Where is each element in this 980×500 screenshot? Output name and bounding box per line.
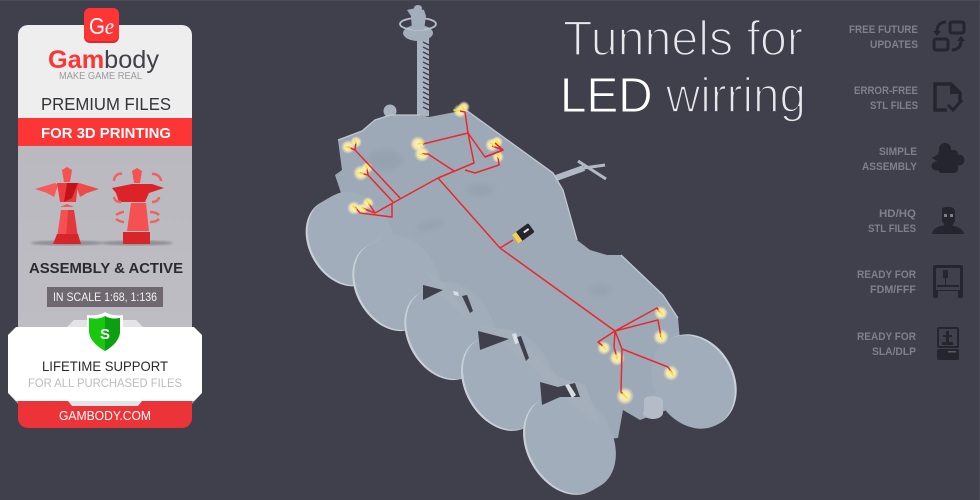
feature: free future updates bbox=[849, 22, 965, 51]
panel: premium files card bbox=[8, 8, 202, 428]
wheel 4 bbox=[445, 315, 571, 445]
vehicle model bbox=[291, 5, 753, 500]
figure shadows bbox=[31, 240, 103, 246]
heading: premium files: PREMIUM FILES bbox=[41, 94, 171, 114]
banner: for 3D printing bbox=[18, 118, 192, 146]
suspension highlights bbox=[453, 291, 576, 398]
rear wheel bbox=[635, 319, 753, 444]
support band bbox=[8, 320, 202, 406]
wheel 1 bbox=[291, 178, 410, 300]
title: Tunnels for bbox=[563, 12, 803, 66]
logo badge: Ge bbox=[89, 13, 114, 39]
feature: ready for sla dlp: READY FOR bbox=[857, 331, 916, 343]
feature: ready for fdm fff bbox=[857, 265, 963, 298]
feature: ready for fdm fff: READY FOR bbox=[857, 269, 916, 281]
feature: error-free stl files bbox=[854, 83, 962, 112]
title bbox=[560, 12, 806, 123]
icon: battery bbox=[512, 223, 535, 244]
hull frame over wheels bbox=[425, 270, 600, 425]
LED glows bbox=[341, 101, 679, 405]
wheels bbox=[291, 178, 753, 500]
brand wordmark: Gambody bbox=[48, 46, 159, 74]
LED points bbox=[346, 106, 673, 398]
wheel 2 bbox=[337, 221, 457, 345]
feature: error-free stl files: STL FILES bbox=[870, 100, 918, 112]
feature: hd hq stl files: STL FILES bbox=[868, 223, 916, 235]
gaps between wheels bbox=[423, 285, 580, 405]
wheel 3 bbox=[389, 268, 511, 394]
hull bbox=[335, 110, 700, 440]
feature: free future updates: FREE FUTURE bbox=[849, 24, 918, 36]
wheel 5 bbox=[506, 377, 633, 500]
icon: green shield: S bbox=[100, 326, 110, 343]
title: LED wirring bbox=[560, 69, 806, 123]
hull upper edge highlight bbox=[338, 110, 678, 318]
feature: ready for sla dlp bbox=[857, 327, 959, 360]
feature: ready for sla dlp: SLA/DLP bbox=[872, 346, 916, 358]
logo badge bbox=[84, 8, 119, 43]
feature: hd hq stl files bbox=[868, 207, 964, 235]
card top background bbox=[18, 25, 192, 118]
hull shading bbox=[367, 150, 610, 295]
icon: green shield bbox=[87, 312, 123, 354]
heading: lifetime support: LIFETIME SUPPORT bbox=[42, 358, 168, 374]
icon: assembled figure bbox=[35, 167, 99, 244]
icon: articulated figure with rotation arrows bbox=[112, 168, 164, 244]
scale badge bbox=[47, 287, 163, 307]
feature: free future updates: UPDATES bbox=[870, 39, 918, 51]
tower bbox=[400, 5, 436, 116]
feature: simple assembly bbox=[862, 143, 964, 173]
heading: assembly and active: ASSEMBLY & ACTIVE bbox=[29, 261, 183, 277]
brand wordmark: MAKE GAME REAL bbox=[59, 71, 142, 82]
scale badge: IN SCALE 1:68, 1:136 bbox=[53, 292, 157, 304]
rear antenna bbox=[556, 161, 606, 179]
feature: hd hq stl files: HD/HQ bbox=[879, 208, 916, 220]
feature: error-free stl files: ERROR-FREE bbox=[854, 85, 918, 97]
footer: site link bbox=[18, 399, 192, 428]
feature: simple assembly: SIMPLE bbox=[879, 146, 917, 158]
grey preview area bbox=[18, 146, 192, 331]
banner: for 3D printing: FOR 3D PRINTING bbox=[41, 125, 171, 142]
dome bbox=[384, 104, 396, 118]
feature: ready for fdm fff: FDM/FFF bbox=[870, 284, 916, 296]
caption: purchased files: FOR ALL PURCHASED FILES bbox=[28, 376, 182, 390]
exhaust bbox=[643, 396, 663, 419]
footer: site link: GAMBODY.COM bbox=[59, 409, 151, 423]
figure shadows right bbox=[101, 240, 173, 246]
feature: simple assembly: ASSEMBLY bbox=[862, 161, 918, 173]
wiring tunnels bbox=[348, 111, 672, 396]
